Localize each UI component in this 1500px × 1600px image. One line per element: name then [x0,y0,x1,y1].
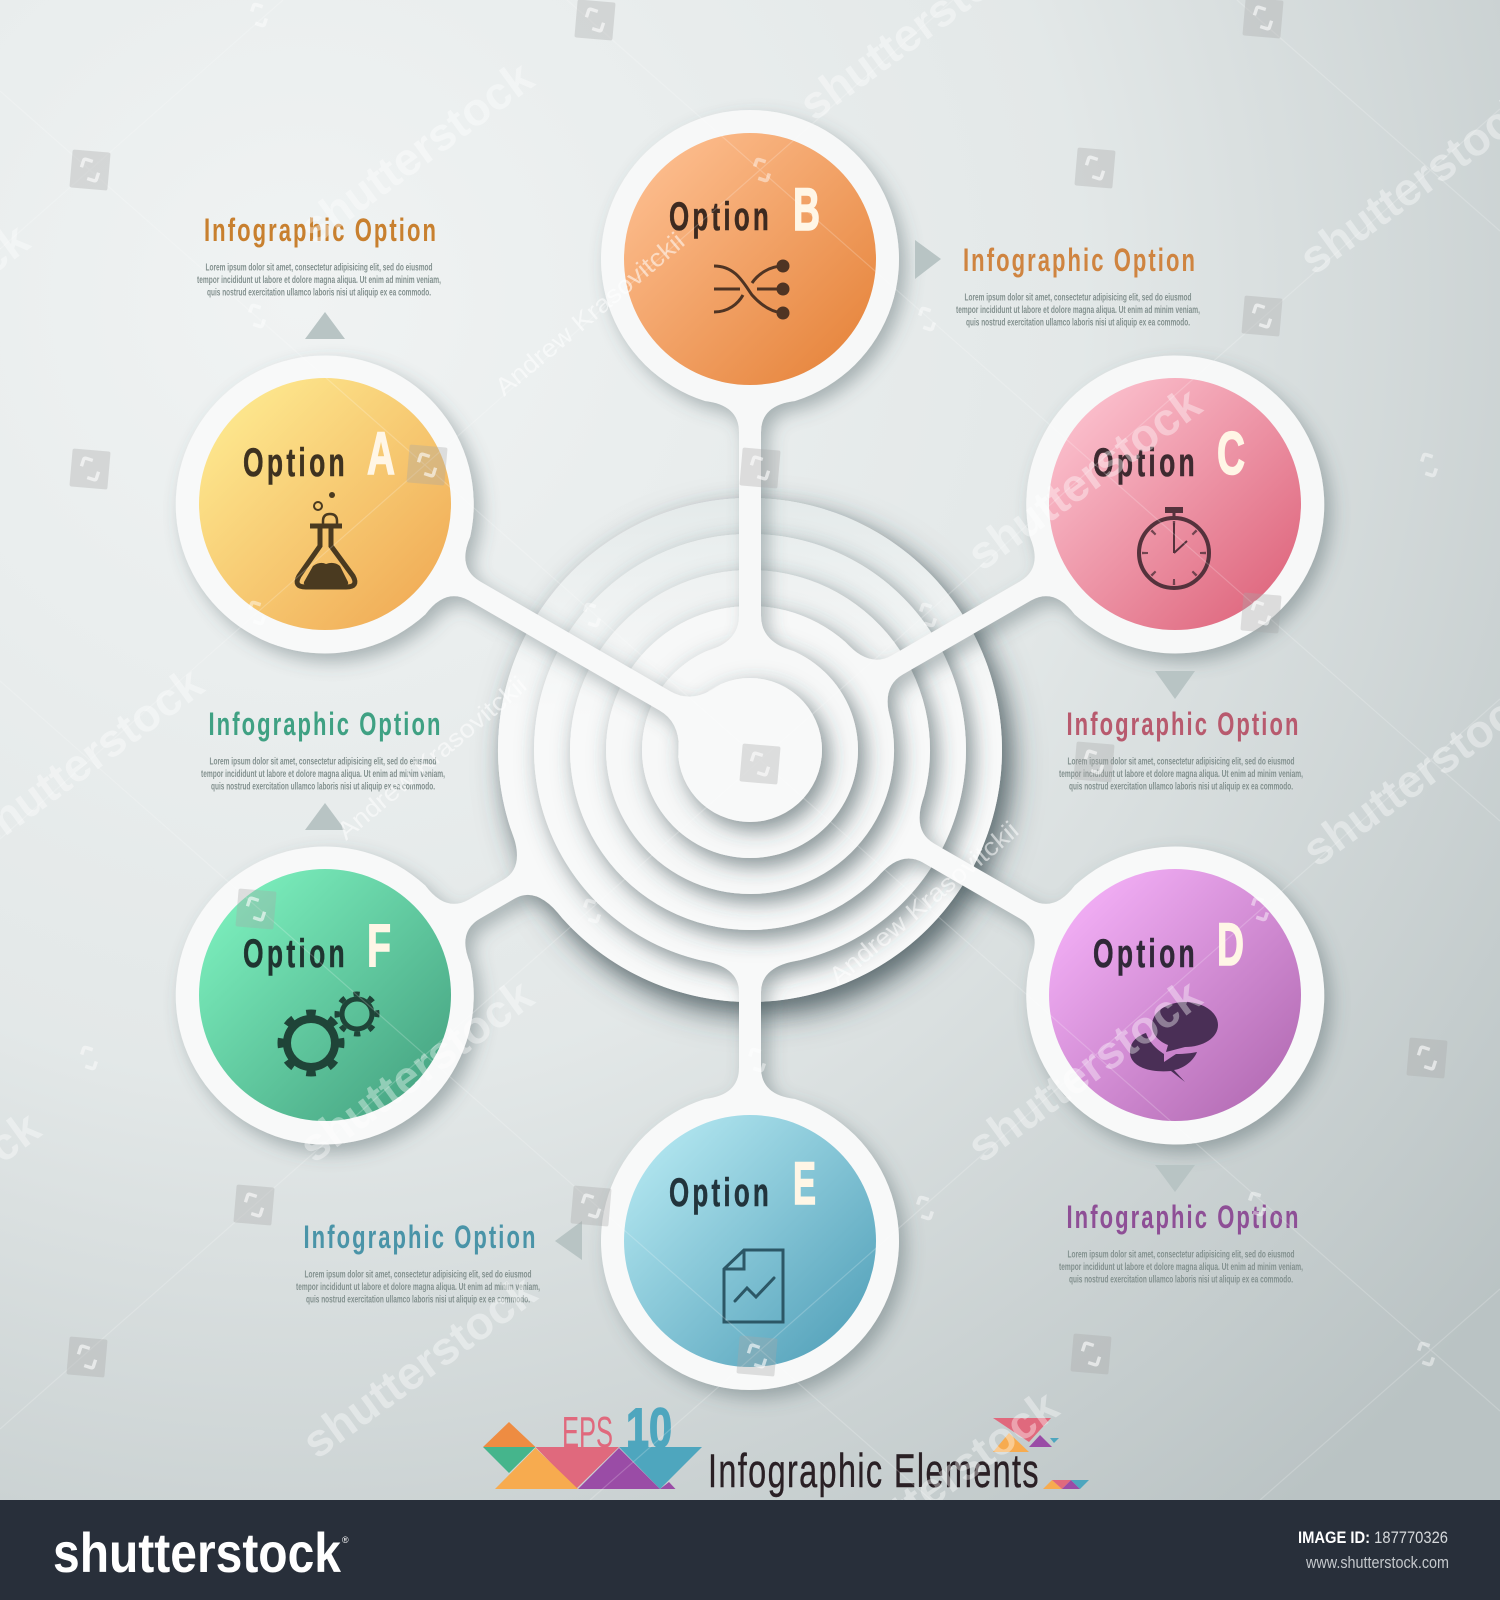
small tangram bottom [1043,1480,1089,1489]
text block B: Lorem ipsum dolor sit amet, consectetur adipisicing elit, sed do eiusmod [964,292,1192,304]
letter C: C [1217,420,1245,487]
label: Option A: Option [243,441,348,485]
text block F [201,756,445,792]
small tangram top [993,1418,1059,1452]
heading E: Infographic Option [304,1219,538,1255]
badge E [624,1115,876,1367]
icon: shuffle [714,260,790,320]
letter E: E [793,1150,816,1217]
label: Option C: Option [1093,441,1198,485]
watermarks: shutterstock [957,376,1211,580]
letter B: B [793,176,820,243]
text block C: Lorem ipsum dolor sit amet, consectetur adipisicing elit, sed do eiusmod [1068,756,1294,768]
text block D: tempor incididunt ut labore et dolore magna aliqua. Ut enim ad minim veniam, [1059,1261,1303,1273]
watermarks: shutterstock [289,50,543,254]
text block D: Lorem ipsum dolor sit amet, consectetur adipisicing elit, sed do eiusmod [1068,1248,1294,1260]
icon: flask [297,492,355,587]
arrow B [915,240,941,279]
arrow A [305,312,345,339]
arrow D [1155,1165,1195,1192]
label: Option E: Option [669,1171,772,1215]
text block B: tempor incididunt ut labore et dolore magna aliqua. Ut enim ad minim veniam, [956,304,1200,316]
bottom title: Infographic Elements [708,1444,1040,1497]
connector and outer ring F [70,406,1094,1288]
icon: gears [281,994,377,1073]
arrow F [305,803,345,830]
text block F: quis nostrud exercitation ullamco laboris nisi ut aliquip ex ea commodo. [211,780,435,792]
text block B [956,292,1200,328]
panel: option D [504,504,1394,1286]
bottom logo: EPS 10 tangram: 10 [626,1396,672,1459]
badge D [1049,869,1301,1121]
panel: option B [601,110,1200,858]
text block D [1059,1248,1303,1286]
badge B [624,133,876,385]
text block C: tempor incididunt ut labore et dolore magna aliqua. Ut enim ad minim veniam, [1059,768,1303,780]
text block A: tempor incididunt ut labore et dolore magna aliqua. Ut enim ad minim veniam, [197,274,441,286]
text block A: quis nostrud exercitation ullamco laboris nisi ut aliquip ex ea commodo. [207,286,431,298]
icon: document chart [724,1250,783,1322]
connector and ring B [601,110,899,858]
letter D: D [1217,911,1244,978]
icon: speech bubbles [1130,1002,1218,1082]
icon: stopwatch [1139,507,1209,588]
registered mark: ® [342,1535,349,1545]
badge A [199,378,451,630]
watermarks: shutterstock [289,968,543,1172]
panel: option A [121,212,887,915]
panel: option F [70,406,1094,1288]
image id: IMAGE ID: 187770326 [1298,1528,1448,1547]
arrow C [1155,671,1195,699]
text block A [197,262,441,298]
text block E: Lorem ipsum dolor sit amet, consectetur adipisicing elit, sed do eiusmod [304,1268,532,1280]
panel: option E [296,534,966,1390]
footer logo: shutterstock [53,1521,342,1584]
connector and ring D [504,504,1394,1226]
watermarks: Andrew Krasovitckii [490,227,690,402]
watermarks: Andrew Krasovitckii [332,671,532,846]
label: Option F: Option [243,932,348,976]
panel: option C [551,301,1379,951]
heading B: Infographic Option [963,242,1197,278]
connector and ring E [534,534,966,1390]
watermarks: shutterstock [814,1379,1068,1583]
site url: www.shutterstock.com [1305,1553,1449,1572]
connector and ring C [551,301,1379,951]
heading F: Infographic Option [208,706,442,742]
heading C: Infographic Option [1066,706,1300,742]
text block D: quis nostrud exercitation ullamco laboris nisi ut aliquip ex ea commodo. [1069,1274,1293,1286]
heading D: Infographic Option [1066,1199,1300,1235]
watermarks: Andrew Krasovitckii [824,816,1024,991]
bottom logo: EPS 10 tangram [483,1396,702,1489]
text block B: quis nostrud exercitation ullamco laboris nisi ut aliquip ex ea commodo. [966,316,1190,328]
text block C [1059,756,1303,792]
label: Option D: Option [1093,932,1198,976]
heading A: Infographic Option [204,212,438,248]
footer bar [0,1500,1500,1600]
connector and central disc A [121,301,887,915]
text block E: quis nostrud exercitation ullamco laboris nisi ut aliquip ex ea commodo. [306,1294,530,1306]
watermarks: shutterstock [292,1264,546,1468]
text block F: Lorem ipsum dolor sit amet, consectetur adipisicing elit, sed do eiusmod [210,756,436,768]
label: Option B: Option [669,195,772,239]
text block E [296,1268,540,1306]
watermarks: shutterstock [957,968,1211,1172]
letter A: A [367,420,395,487]
badge F [199,869,451,1121]
text block A: Lorem ipsum dolor sit amet, consectetur adipisicing elit, sed do eiusmod [206,262,432,274]
bottom logo: EPS 10 tangram: EPS [562,1408,613,1457]
text block C: quis nostrud exercitation ullamco laboris nisi ut aliquip ex ea commodo. [1069,780,1293,792]
letter F: F [367,912,391,979]
badge C [1049,378,1301,630]
arrow E [555,1221,582,1260]
text block E: tempor incididunt ut labore et dolore magna aliqua. Ut enim ad minim veniam, [296,1281,540,1293]
text block F: tempor incididunt ut labore et dolore magna aliqua. Ut enim ad minim veniam, [201,768,445,780]
